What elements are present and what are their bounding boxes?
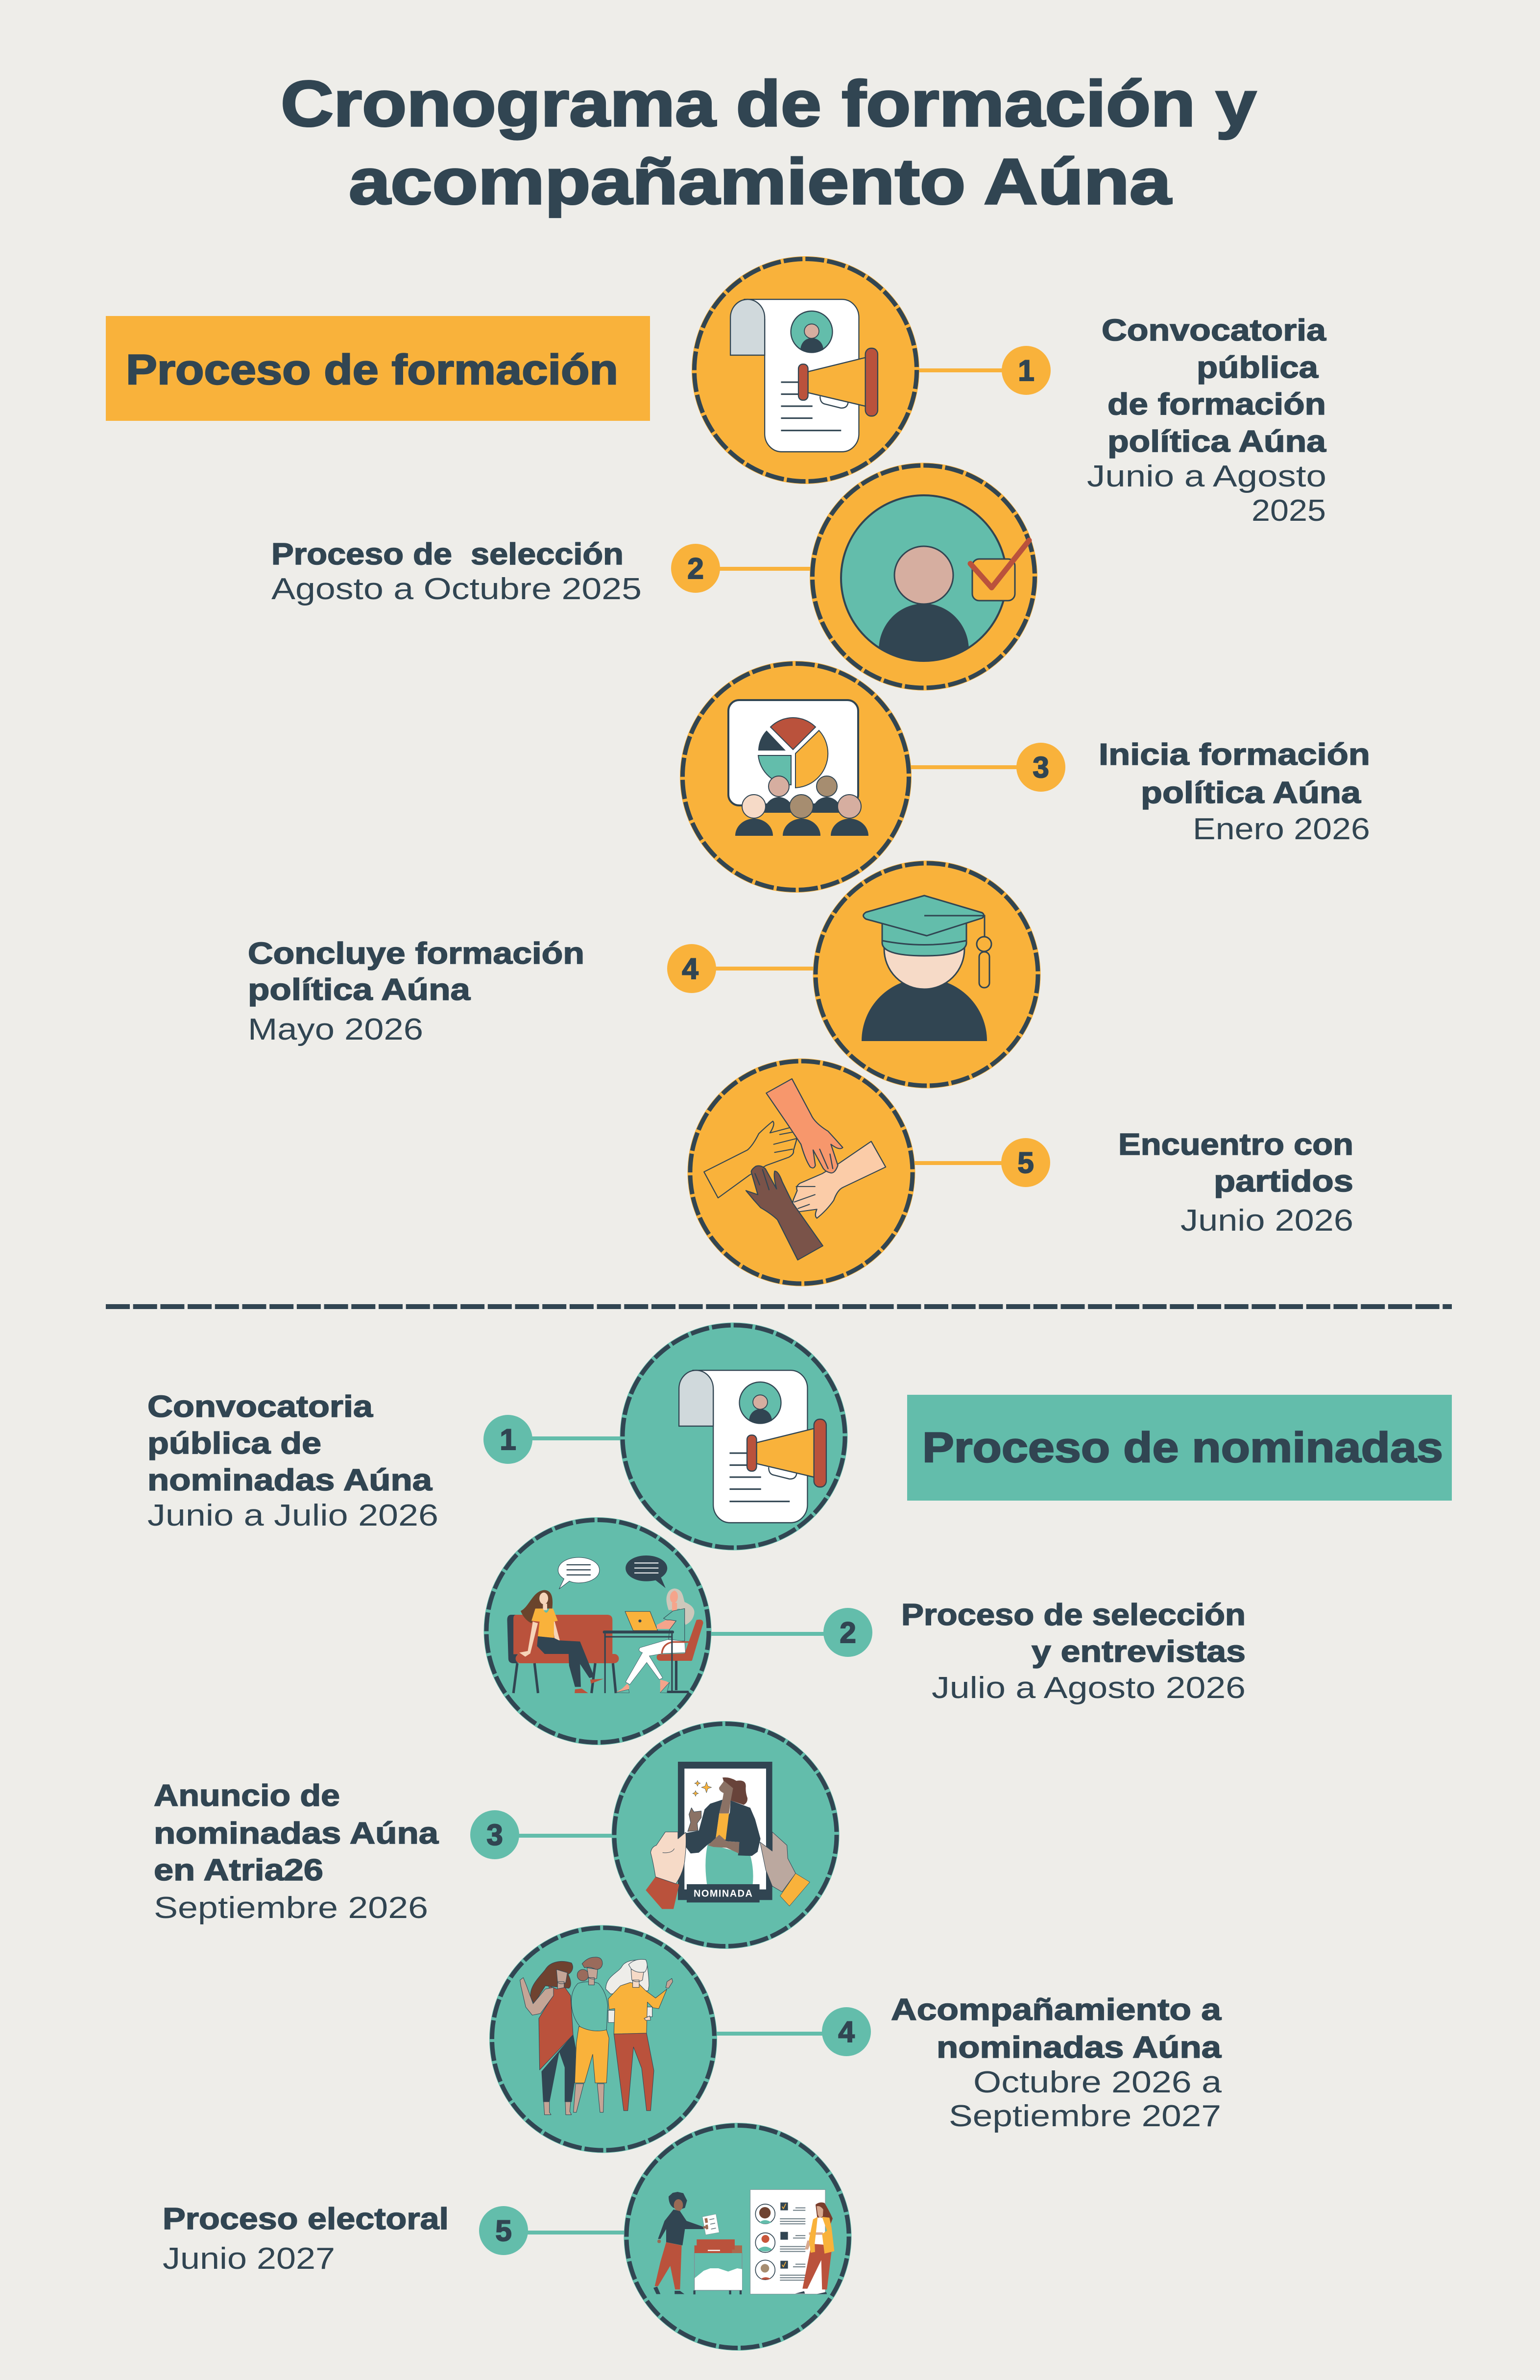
text: step 3 formación: Enero 2026: [1193, 812, 1370, 846]
text: step 1 formación: Junio a Agosto: [1087, 460, 1326, 493]
text: step 3 nominadas: Anuncio de: [154, 1779, 340, 1813]
text: step 2 nominadas: Proceso de selección: [901, 1598, 1246, 1632]
text: step 1 nominadas: Junio a Julio 2026: [147, 1499, 438, 1532]
connector lines formación: [713, 368, 1019, 1165]
title: acompañamiento Aúna: [349, 146, 1172, 218]
number badges nominadas: 1: [500, 1423, 516, 1456]
text: step 4 nominadas: nominadas Aúna: [937, 2031, 1222, 2064]
text: step 2 formación: [271, 537, 642, 606]
text: step 1 nominadas: [147, 1390, 438, 1532]
text: step 1 formación: [1087, 314, 1326, 528]
text: step 1 formación: política Aúna: [1107, 425, 1326, 459]
text: step 5 nominadas: Proceso electoral: [163, 2202, 449, 2236]
text: step 5 formación: Encuentro con: [1118, 1128, 1353, 1162]
title: [281, 68, 1256, 218]
text: step 4 formación: [248, 937, 584, 1046]
text: step 2 formación: Agosto a Octubre 2025: [271, 572, 642, 606]
text: step 4 nominadas: Acompañamiento a: [891, 1993, 1222, 2027]
connector lines nominadas: [514, 1436, 827, 2234]
text: step 5 nominadas: [163, 2202, 449, 2276]
text: step 5 formación: [1118, 1128, 1353, 1238]
section heading: Proceso de formación: [106, 316, 650, 421]
section heading: Proceso de formación: Proceso de formación: [126, 346, 618, 393]
text: step 1 formación: pública: [1197, 351, 1319, 385]
section heading: Proceso de nominadas: [907, 1395, 1452, 1501]
text: step 3 formación: [1099, 738, 1370, 846]
step 4 formación: circle with graduate: [813, 860, 1040, 1089]
text: step 3 nominadas: [154, 1779, 439, 1925]
text: step 3 nominadas: nominadas Aúna: [154, 1817, 439, 1850]
number badges nominadas: 5: [495, 2214, 512, 2247]
text: step 1 nominadas: pública de: [147, 1427, 321, 1460]
section heading: Proceso de nominadas: Proceso de nominadas: [922, 1424, 1443, 1471]
text: step 3 formación: política Aúna: [1141, 776, 1361, 810]
text: step 2 formación: Proceso de selección: [271, 537, 624, 571]
text: step 2 nominadas: [901, 1598, 1246, 1705]
text: step 5 formación: Junio 2026: [1180, 1204, 1353, 1238]
number badges nominadas: 2: [840, 1616, 856, 1649]
number badges formación: 4: [682, 952, 698, 985]
step 2 formación: circle with person and checkbox: [810, 462, 1037, 697]
step 4 nominadas: circle with three women: [489, 1925, 717, 2153]
text: step 3 nominadas: Septiembre 2026: [154, 1891, 428, 1925]
step 5 formación: circle with four hands: [688, 1058, 915, 1287]
number badges formación: 5: [1017, 1146, 1034, 1179]
number badges nominadas: [470, 1415, 872, 2255]
title: Cronograma de formación y: [281, 68, 1256, 140]
step 3 nominadas: circle with hands holding nominee portrait: NOMINADA: [694, 1889, 752, 1899]
text: step 2 nominadas: Julio a Agosto 2026: [932, 1671, 1246, 1705]
step 2 nominadas: circle with interview scene: [484, 1517, 711, 1745]
step 1 nominadas: circle with document and megaphone: [620, 1323, 847, 1550]
text: step 1 formación: Convocatoria: [1102, 314, 1326, 347]
text: step 1 nominadas: Convocatoria: [147, 1390, 373, 1424]
text: step 2 nominadas: y entrevistas: [1032, 1635, 1246, 1669]
text: step 1 formación: de formación: [1107, 388, 1326, 421]
number badges formación: 2: [687, 552, 704, 585]
step 3 formación: circle with presentation board and audience: [680, 661, 912, 893]
text: step 4 formación: política Aúna: [248, 973, 471, 1007]
step 5 nominadas: circle with voter, ballot box and candidate board: [624, 2123, 851, 2351]
number badges nominadas: 4: [838, 2016, 855, 2048]
text: step 4 nominadas: Septiembre 2027: [949, 2099, 1221, 2133]
number badges formación: 3: [1033, 751, 1049, 784]
text: step 4 formación: Concluye formación: [248, 937, 584, 971]
text: step 5 formación: partidos: [1214, 1165, 1353, 1198]
text: step 3 formación: Inicia formación: [1099, 738, 1370, 772]
number badges formación: 1: [1018, 354, 1035, 387]
text: step 4 formación: Mayo 2026: [248, 1013, 423, 1046]
text: step 1 nominadas: nominadas Aúna: [147, 1463, 433, 1497]
text: step 3 nominadas: en Atria26: [154, 1853, 323, 1887]
number badges nominadas: 3: [486, 1819, 503, 1851]
text: step 4 nominadas: Octubre 2026 a: [973, 2065, 1222, 2099]
number badges formación: [667, 346, 1065, 1187]
text: step 1 formación: 2025: [1251, 494, 1326, 528]
text: step 5 nominadas: Junio 2027: [163, 2242, 335, 2276]
step 1 formación: circle with document and megaphone: [692, 256, 919, 484]
step 3 nominadas: circle with hands holding nominee portrait: [611, 1721, 840, 1949]
text: step 4 nominadas: [891, 1993, 1222, 2133]
